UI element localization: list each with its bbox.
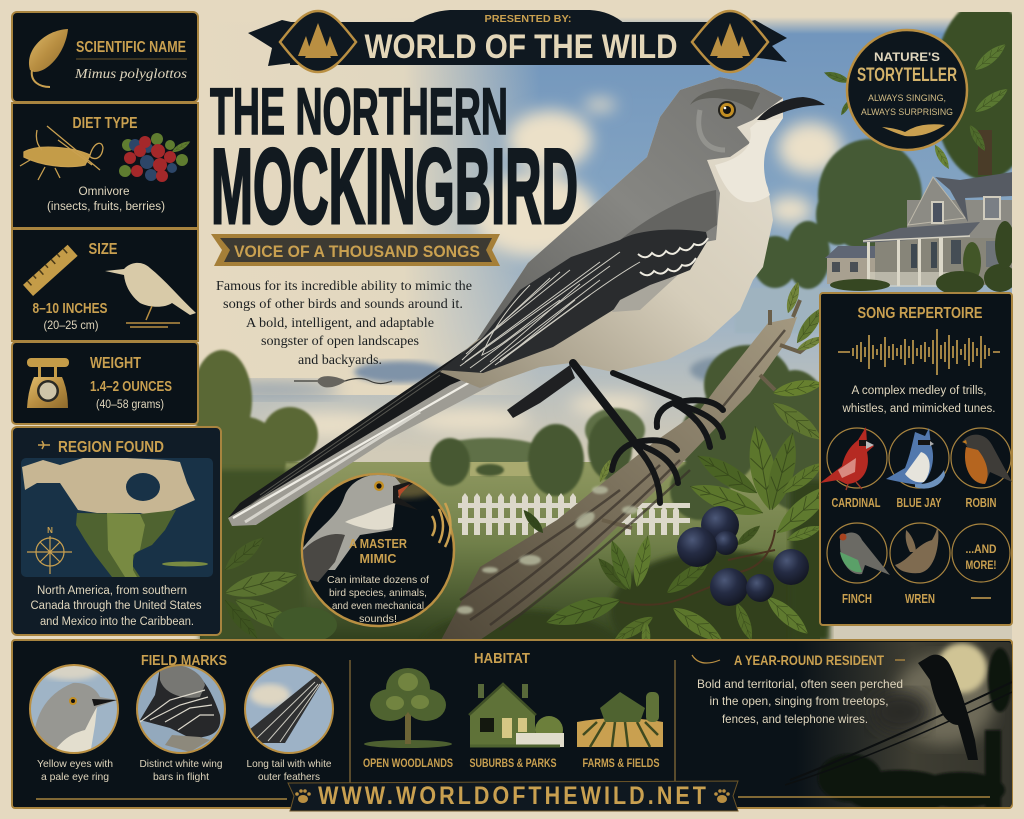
panel: size: 8–10 INCHES <box>32 301 108 317</box>
panel: scientific name: SCIENTIFIC NAME <box>76 39 186 56</box>
habitat section <box>363 650 663 770</box>
panel: song repertoire: A complex medley of trills, <box>852 385 986 397</box>
panel: size: SIZE <box>88 241 118 258</box>
badge: nature's storyteller: STORYTELLER <box>857 65 957 86</box>
and more circle: ...AND <box>966 542 997 556</box>
panel: song repertoire: whistles, and mimicked tunes. <box>841 403 996 415</box>
panel: scientific name: Mimus polyglottos <box>74 67 188 82</box>
perched bird silhouette <box>918 655 978 760</box>
presenter ribbon: WORLD OF THE WILD <box>364 28 678 66</box>
panel: region found <box>12 427 221 635</box>
habitat section: FARMS & FIELDS <box>582 758 660 770</box>
lake <box>735 288 835 333</box>
field marks section <box>28 652 335 783</box>
text: MOCKINGBIRD <box>211 126 578 246</box>
and more circle: MORE! <box>966 558 996 572</box>
icon: ruler <box>23 245 78 296</box>
panel: master mimic callout <box>302 462 454 626</box>
icon: berry cluster <box>119 133 192 182</box>
panel: region found: North America, from southern <box>37 585 187 597</box>
illustrated landscape scene <box>194 12 1012 640</box>
compass rose <box>27 526 72 574</box>
back and head <box>477 77 783 340</box>
far wing tip <box>507 365 575 418</box>
wren <box>890 523 950 583</box>
mark: eye <box>28 660 120 755</box>
icon: gold feather <box>29 29 68 87</box>
icon: kitchen scale <box>27 358 69 408</box>
mockingbird illustration <box>228 77 825 526</box>
year-round resident section: Bold and territorial, often seen perched <box>697 677 903 691</box>
panel: region found: REGION FOUND <box>58 439 164 456</box>
field marks section: Long tail with white <box>246 758 332 770</box>
intro paragraph: Famous for its incredible ability to mimic the <box>216 278 472 293</box>
small house <box>827 258 875 284</box>
body <box>440 77 783 388</box>
badge: nature's storyteller: NATURE'S <box>874 50 940 64</box>
mimic bird portrait <box>303 475 430 582</box>
panel: master mimic callout: sounds! <box>359 613 397 625</box>
panel: master mimic callout: and even mechanical <box>332 600 424 612</box>
badge: nature's storyteller <box>847 30 967 150</box>
panel: diet type: DIET TYPE <box>72 115 138 132</box>
icon: grasshopper <box>20 126 103 180</box>
panel: master mimic callout: A MASTER <box>349 536 408 551</box>
field marks section: Distinct white wing <box>140 758 223 770</box>
throat <box>715 118 783 202</box>
panel: song repertoire: WREN <box>905 591 935 606</box>
panel: song repertoire: FINCH <box>842 591 872 606</box>
panel: song repertoire: CARDINAL <box>832 495 881 510</box>
panel: master mimic callout: MIMIC <box>360 551 397 566</box>
icon: feather <box>882 124 945 136</box>
icon: sound waves <box>432 503 450 547</box>
robin <box>951 428 1012 488</box>
habitat section: OPEN WOODLANDS <box>363 758 453 770</box>
finch <box>827 523 890 583</box>
panel: weight <box>12 342 198 424</box>
panel: master mimic callout: bird species, animals, <box>329 587 427 599</box>
legs and feet <box>573 363 723 503</box>
field marks section: Yellow eyes with <box>37 758 113 770</box>
field marks section: outer feathers <box>258 771 320 783</box>
intro paragraph: songs of other birds and sounds around it. <box>223 296 463 311</box>
main house <box>907 200 1012 238</box>
presenter ribbon <box>248 10 787 72</box>
subtitle ribbon <box>211 234 500 266</box>
panel: size: (20–25 cm) <box>44 318 98 332</box>
panel: diet type: (insects, fruits, berries) <box>47 201 165 213</box>
bottom panel <box>12 640 1012 814</box>
intro paragraph: and backyards. <box>298 352 382 367</box>
panel: song repertoire: ROBIN <box>966 495 996 510</box>
left trees <box>194 348 320 473</box>
year-round resident section: A YEAR-ROUND RESIDENT <box>734 653 885 668</box>
wing <box>440 230 708 373</box>
intro paragraph <box>216 278 472 367</box>
panel: master mimic callout: Can imitate dozens of <box>327 574 429 586</box>
beak <box>757 97 825 120</box>
field marks section: FIELD MARKS <box>141 652 227 669</box>
and more circle <box>952 524 1010 582</box>
eye <box>718 101 736 119</box>
subtitle ribbon: VOICE OF A THOUSAND SONGS <box>234 242 480 261</box>
panel: weight: WEIGHT <box>90 355 141 372</box>
branch with twigs <box>440 280 838 652</box>
icon: bird silhouette <box>105 263 196 327</box>
mark: tail <box>243 663 335 755</box>
panel: song repertoire <box>820 293 1012 625</box>
lower foliage <box>440 548 830 630</box>
clouds <box>303 88 851 442</box>
tail <box>228 342 505 526</box>
badge: nature's storyteller: ALWAYS SURPRISING <box>861 107 953 118</box>
right medallion <box>692 11 768 72</box>
icon: suburbs house <box>469 684 564 747</box>
field marks section: a pale eye ring <box>41 771 109 783</box>
intro paragraph: A bold, intelligent, and adaptable <box>246 315 434 330</box>
intro paragraph: songster of open landscapes <box>261 333 419 348</box>
icon: paw right <box>714 789 730 803</box>
berries <box>677 506 809 606</box>
blue jay <box>886 428 949 489</box>
white picket fence <box>458 493 690 535</box>
website banner: WWW.WORLDOFTHEWILD.NET <box>318 781 706 809</box>
farmhouse and trees <box>756 12 1012 292</box>
cardinal <box>820 427 887 490</box>
badge: nature's storyteller: ALWAYS SINGING, <box>868 93 946 104</box>
panel: song repertoire: BLUE JAY <box>896 495 942 510</box>
panel: region found: Canada through the United States <box>30 600 202 612</box>
year-round resident section <box>680 642 1012 814</box>
year-round resident section: fences, and telephone wires. <box>722 712 868 726</box>
mid-ground trees <box>430 345 835 520</box>
presenter ribbon: PRESENTED BY: <box>484 13 572 25</box>
panel: song repertoire: SONG REPERTOIRE <box>858 305 983 322</box>
panel: scientific name <box>12 12 198 102</box>
title: THE NORTHERN <box>210 74 508 148</box>
left medallion <box>280 11 356 72</box>
field marks section: bars in flight <box>153 771 209 783</box>
ground and fields <box>200 462 820 642</box>
panel: diet type: Omnivore <box>78 184 130 198</box>
distant hills <box>456 406 646 462</box>
tree behind house <box>753 139 922 289</box>
panel: weight: (40–58 grams) <box>96 399 164 411</box>
icon: farm and fields <box>577 692 663 747</box>
waveform <box>838 329 1000 375</box>
range map <box>21 458 213 577</box>
leaves <box>520 280 838 652</box>
compass rose: N <box>47 526 53 535</box>
big tree top right <box>824 12 1012 178</box>
panel: weight: 1.4–2 OUNCES <box>90 379 172 395</box>
year-round resident section: in the open, singing from treetops, <box>710 694 888 708</box>
panel: diet type <box>12 103 198 228</box>
panel: size <box>12 229 198 341</box>
icon: open woodlands tree <box>364 668 452 748</box>
feather divider <box>294 376 392 387</box>
panel: region found: and Mexico into the Caribbean. <box>40 616 194 628</box>
mark: wing <box>135 663 227 755</box>
habitat section: SUBURBS & PARKS <box>470 758 557 770</box>
habitat section: HABITAT <box>474 650 530 667</box>
title <box>210 74 578 246</box>
icon: paw left <box>295 789 311 803</box>
